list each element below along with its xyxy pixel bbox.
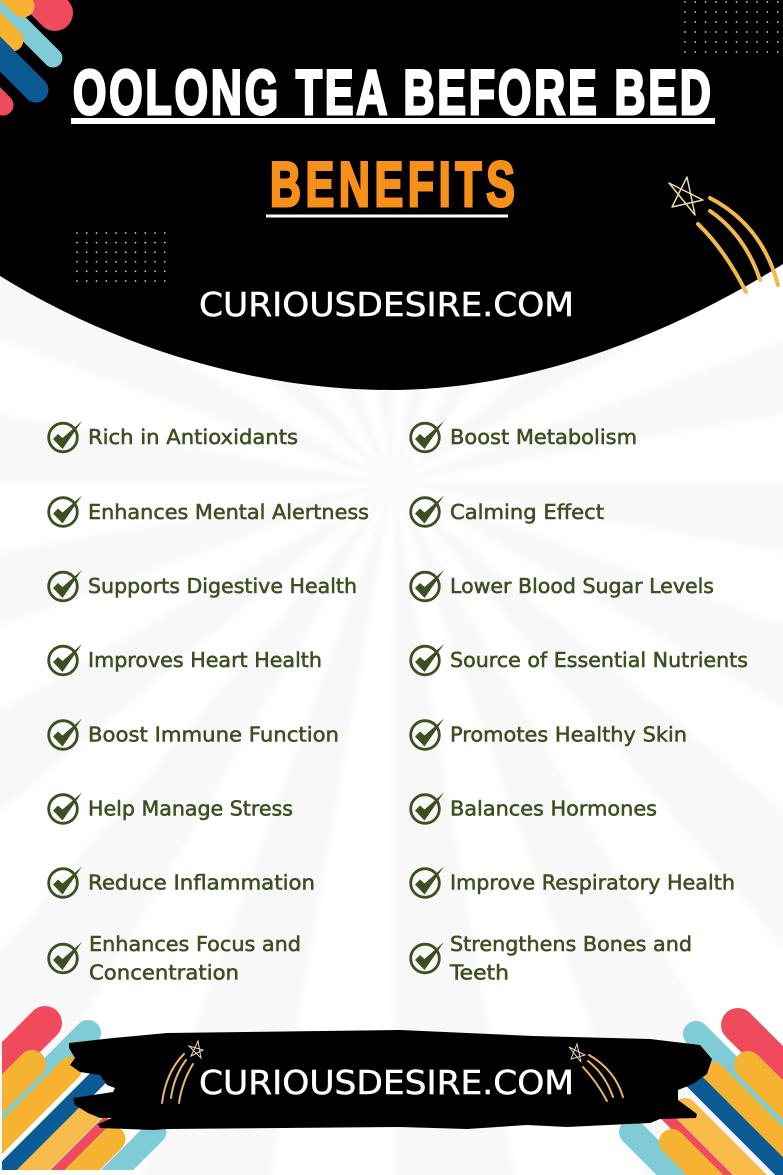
item: mental alertness: Enhances Mental Alertness xyxy=(88,500,369,524)
item: bones and teeth: Strengthens Bones and xyxy=(450,932,692,956)
item: calming effect xyxy=(411,496,604,526)
item: focus and concentration: Enhances Focus and xyxy=(89,932,301,956)
item: bones and teeth xyxy=(411,932,692,984)
item: blood sugar: Lower Blood Sugar Levels xyxy=(450,574,714,598)
item: focus and concentration xyxy=(49,932,301,984)
item: healthy skin: Promotes Healthy Skin xyxy=(450,722,687,746)
item: manage stress: Help Manage Stress xyxy=(88,796,293,820)
item: digestive health xyxy=(49,570,357,601)
item: rich in antioxidants: Rich in Antioxidants xyxy=(88,425,298,449)
icon: footer shooting star left xyxy=(162,1041,203,1103)
item: respiratory health xyxy=(411,866,735,897)
item: hormones: Balances Hormones xyxy=(450,796,657,820)
benefits list: left column xyxy=(49,421,369,984)
item: essential nutrients: Source of Essential Nutrients xyxy=(450,648,748,672)
item: immune function xyxy=(49,718,339,749)
item: digestive health: Supports Digestive Health xyxy=(88,574,357,598)
item: healthy skin xyxy=(411,718,687,749)
item: focus and concentration: Concentration xyxy=(89,960,239,984)
icon: shooting star xyxy=(669,177,778,292)
dot grid left xyxy=(77,233,167,281)
item: manage stress xyxy=(49,792,293,823)
item: inflammation: Reduce Inflammation xyxy=(88,870,315,894)
footer brush banner xyxy=(69,1030,712,1130)
item: bones and teeth: Teeth xyxy=(449,960,509,984)
item: heart health xyxy=(49,644,322,675)
item: inflammation xyxy=(49,866,315,897)
item: blood sugar xyxy=(411,570,714,601)
item: rich in antioxidants xyxy=(49,421,298,452)
item: boost metabolism xyxy=(411,421,637,452)
black header arc xyxy=(0,0,783,390)
item: immune function: Boost Immune Function xyxy=(88,722,339,746)
item: calming effect: Calming Effect xyxy=(450,500,604,524)
top-left colour stripes xyxy=(0,0,55,105)
website footer: CURIOUSDESIRE.COM xyxy=(199,1063,574,1102)
subtitle: benefits: BENEFITS xyxy=(270,150,515,220)
benefits list: right column xyxy=(411,421,748,984)
item: essential nutrients xyxy=(411,644,748,675)
bottom-left colour stripes xyxy=(0,1023,155,1175)
icon: footer shooting star right xyxy=(569,1044,623,1101)
title: OOLONG TEA BEFORE BED xyxy=(73,58,711,128)
item: heart health: Improves Heart Health xyxy=(88,648,322,672)
item: respiratory health: Improve Respiratory Health xyxy=(450,870,735,894)
item: mental alertness xyxy=(49,496,369,526)
dot grid top right xyxy=(685,2,783,52)
item: hormones xyxy=(411,792,657,823)
website header: CURIOUSDESIRE.COM xyxy=(199,285,574,324)
bottom-right colour stripes xyxy=(632,1025,783,1175)
item: boost metabolism: Boost Metabolism xyxy=(450,425,637,449)
